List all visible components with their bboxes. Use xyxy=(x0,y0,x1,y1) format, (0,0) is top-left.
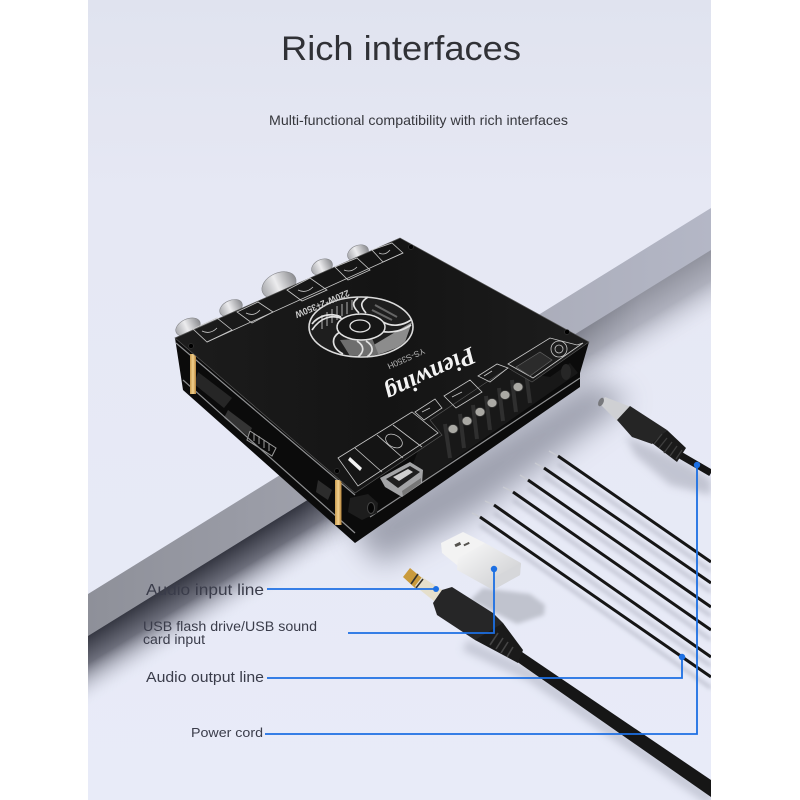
jack body xyxy=(433,587,503,643)
model power text: 220W*2+350W xyxy=(293,287,351,320)
USB dongle xyxy=(441,532,545,624)
stripped wires xyxy=(472,451,711,677)
power plug xyxy=(597,397,711,473)
callout lines and dots xyxy=(265,462,700,734)
thermometer icon on label xyxy=(348,457,362,471)
label: USB input: USB flash drive/USB sound xyxy=(143,619,317,634)
lower board edges xyxy=(176,343,580,533)
infographic canvas xyxy=(88,0,711,800)
board shadow xyxy=(350,380,630,565)
dongle shadow xyxy=(470,588,545,624)
power plug shadow xyxy=(625,435,711,495)
background panel xyxy=(88,0,711,800)
control labels along the back edge xyxy=(193,243,403,342)
wire bodies xyxy=(480,456,711,677)
plug body xyxy=(617,406,667,444)
audio cable xyxy=(403,568,711,797)
label: audio output line: Audio output line xyxy=(146,669,264,686)
label: audio input line: Audio input line xyxy=(146,582,264,599)
top plate xyxy=(175,238,589,493)
USB contacts xyxy=(454,542,470,547)
audio cable shadow xyxy=(465,645,711,800)
fan grille xyxy=(309,297,413,358)
brand logo text: Pienwing xyxy=(381,341,481,407)
audio output leader xyxy=(267,654,685,678)
audio jack socket xyxy=(348,494,378,520)
components on the left side xyxy=(194,372,332,500)
ribs xyxy=(490,633,513,657)
wire tips xyxy=(472,451,558,517)
terminal block xyxy=(400,363,578,497)
table band shadow xyxy=(88,250,711,696)
scene: table band, board and cables xyxy=(88,208,711,800)
knobs xyxy=(173,242,371,340)
USB metal plug xyxy=(441,532,485,566)
strain relief xyxy=(475,623,523,663)
barrel xyxy=(602,397,630,421)
plug cable xyxy=(680,455,711,473)
USB body xyxy=(457,543,521,590)
screw holes xyxy=(188,244,570,474)
board body backing xyxy=(175,338,589,543)
jack rings xyxy=(411,574,423,588)
ribs xyxy=(654,434,682,459)
model number text: YS-S350H xyxy=(386,346,427,371)
label: power cord: Power cord xyxy=(191,725,263,740)
USB leader xyxy=(348,566,497,633)
USB body end xyxy=(493,563,521,590)
subtitle: Multi-functional compatibility with rich interfaces xyxy=(269,112,568,128)
strain relief xyxy=(652,430,686,462)
label: USB input: card input xyxy=(143,632,205,647)
barrel hole xyxy=(598,398,604,406)
gold tip xyxy=(403,568,422,588)
power cord leader xyxy=(265,462,700,734)
RJ connector cut-out xyxy=(516,352,552,376)
title: Rich interfaces xyxy=(281,30,521,68)
jack shaft xyxy=(415,577,442,601)
amplifier board xyxy=(173,238,589,543)
brass standoffs xyxy=(190,354,342,525)
cable xyxy=(516,652,711,797)
speaker and power labels along the front edge xyxy=(338,338,583,486)
USB port xyxy=(380,462,423,497)
wire shadows xyxy=(480,464,711,688)
grey table band xyxy=(88,208,711,636)
audio input leader xyxy=(267,586,439,592)
